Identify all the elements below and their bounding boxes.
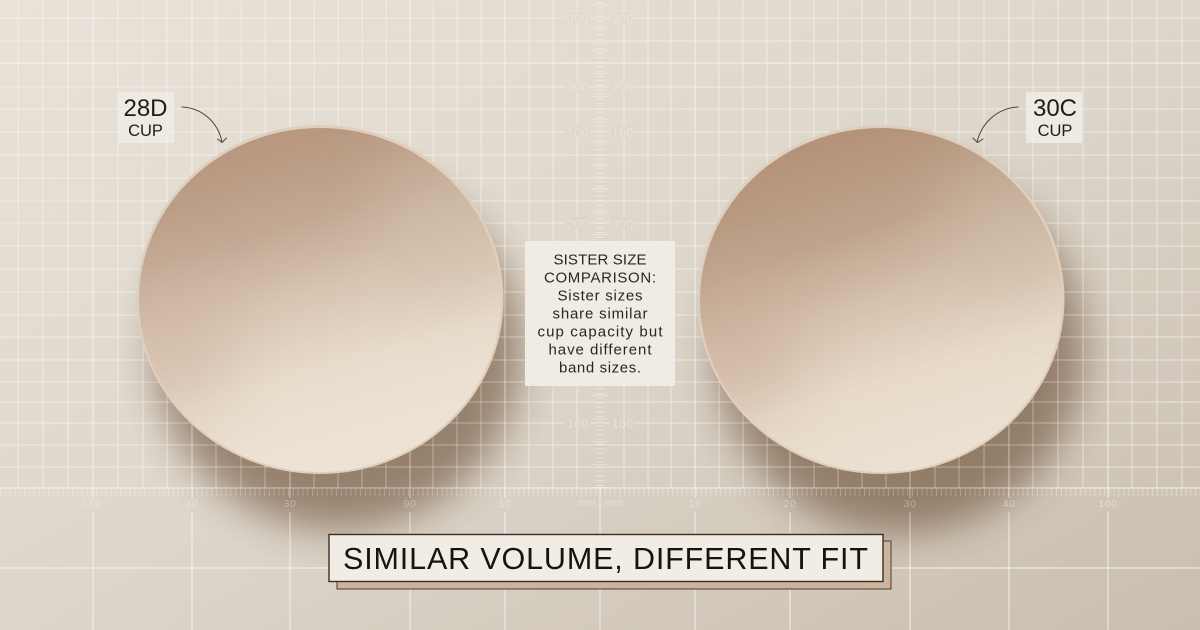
label: 30C cup — [1026, 92, 1082, 143]
callout: sister size comparison: have different — [548, 342, 652, 358]
horizontal ruler labels: 10 — [689, 498, 701, 510]
horizontal ruler labels: 30 — [904, 498, 916, 510]
title banner — [329, 534, 891, 589]
cup shadow overlay — [158, 170, 1080, 530]
label: 28D cup: 28D — [123, 95, 168, 122]
callout: sister size comparison: band sizes. — [559, 360, 641, 376]
horizontal ruler labels: mm — [605, 497, 623, 509]
horizontal ruler labels: mm — [578, 497, 596, 509]
vertical ruler labels: 300 — [567, 12, 589, 26]
vertical ruler labels — [567, 12, 634, 431]
callout: sister size comparison: share similar — [552, 306, 648, 322]
cup: 28D — [120, 125, 525, 474]
vertical ruler labels: 100 — [612, 126, 634, 140]
vertical ruler labels: 300 — [612, 12, 634, 26]
horizontal ruler labels: 40 — [186, 498, 198, 510]
label: 30C cup: CUP — [1038, 122, 1072, 140]
cup shadows — [158, 170, 1080, 530]
arrow: 30C to cup — [973, 107, 1018, 142]
vertical ruler labels: 100 — [612, 417, 634, 431]
arrow: 28D to cup — [182, 107, 226, 142]
vertical ruler labels: 200 — [612, 80, 634, 94]
horizontal ruler labels — [82, 497, 1118, 510]
callout: sister size comparison — [525, 241, 675, 386]
label: 30C cup: 30C — [1033, 95, 1077, 122]
horizontal ruler labels: 40 — [1003, 498, 1015, 510]
vertical ruler labels: 300 — [612, 217, 634, 231]
callout: sister size comparison: cup capacity but — [538, 324, 663, 340]
vertical ruler labels: 100 — [567, 417, 589, 431]
cup: 30C — [685, 125, 1082, 474]
horizontal ruler labels: 160 — [82, 498, 102, 510]
label: 28D cup — [118, 92, 174, 143]
vertical ruler labels: 200 — [567, 80, 589, 94]
horizontal ruler labels: 30 — [284, 498, 296, 510]
label: 28D cup: CUP — [128, 122, 163, 140]
vertical ruler — [596, 2, 604, 488]
horizontal ruler — [0, 489, 1200, 496]
vertical ruler labels: 100 — [567, 126, 589, 140]
vertical ruler labels: 200 — [567, 217, 589, 231]
horizontal ruler labels: 90 — [404, 498, 416, 510]
callout: sister size comparison: Sister sizes — [558, 288, 642, 304]
horizontal ruler labels: 20 — [784, 498, 796, 510]
title banner: SIMILAR VOLUME, DIFFERENT FIT — [343, 542, 868, 576]
horizontal ruler labels: 10 — [499, 498, 511, 510]
horizontal ruler labels: 160 — [1098, 498, 1118, 510]
callout: sister size comparison: SISTER SIZE — [554, 252, 646, 268]
callout: sister size comparison: COMPARISON: — [544, 270, 656, 286]
